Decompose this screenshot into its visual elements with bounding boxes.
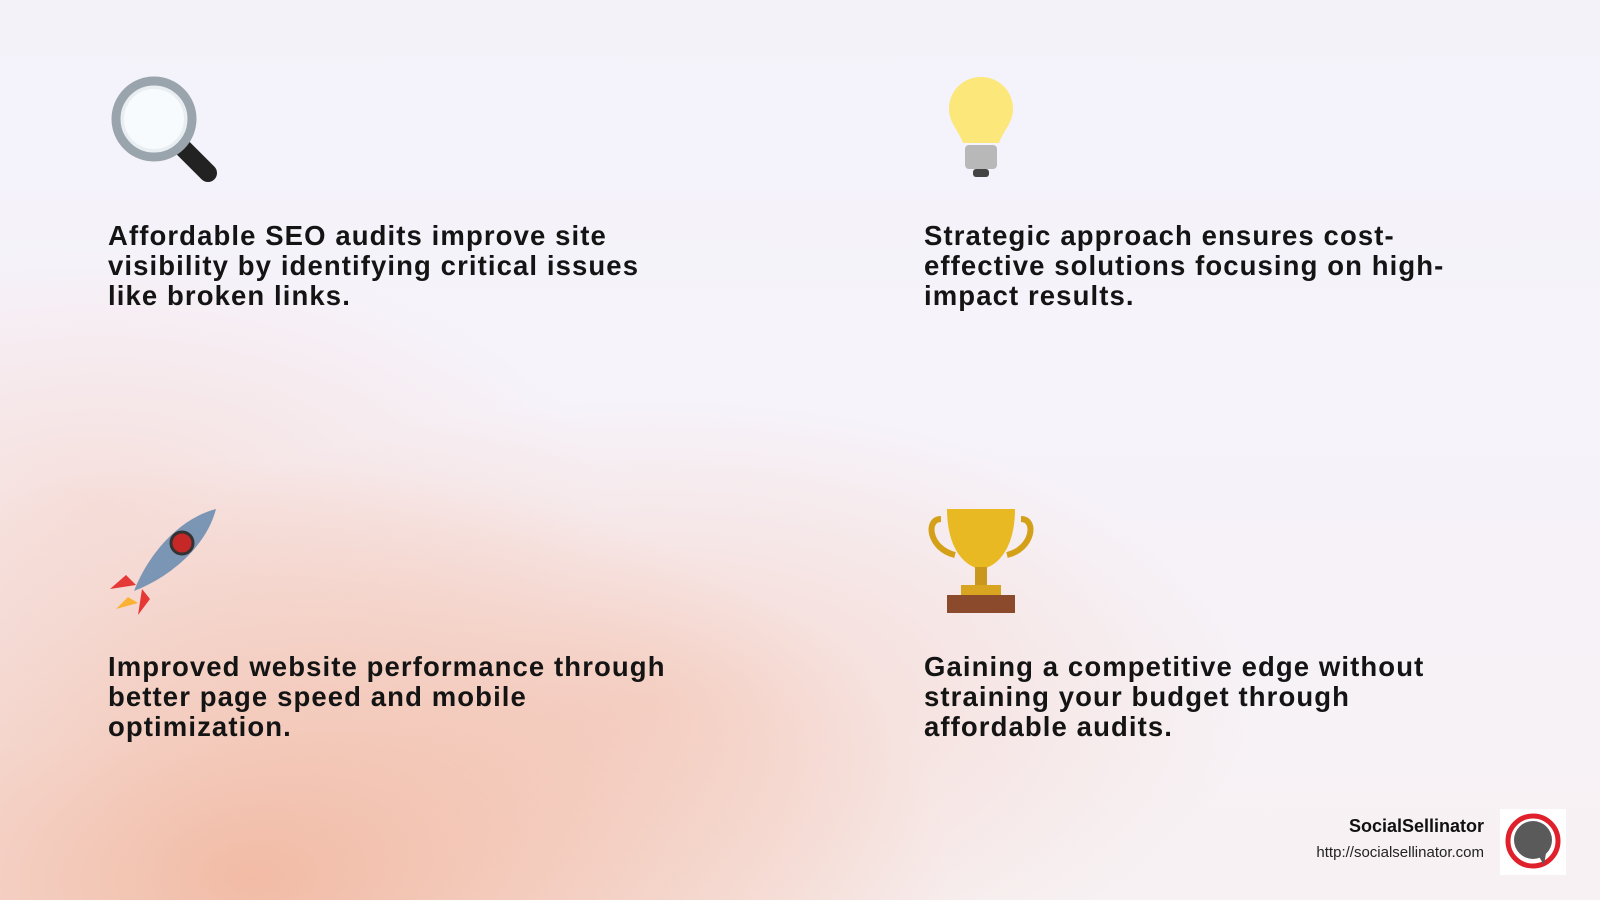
brand block xyxy=(1316,809,1566,875)
logo xyxy=(1500,809,1566,875)
brand url: http://socialsellinator.com xyxy=(1316,844,1484,861)
brand name: SocialSellinator xyxy=(1349,816,1484,836)
icon: light bulb xyxy=(949,77,1013,177)
icon: magnifying glass xyxy=(112,76,217,182)
text: strategic: Strategic approach ensures cost-effective solutions focusing on high-impact results. xyxy=(924,220,1444,311)
text: audits: Affordable SEO audits improve site visibility by identifying critical issues like broken links. xyxy=(108,220,639,311)
icon: rocket xyxy=(110,509,216,615)
icon: trophy xyxy=(928,509,1034,613)
text: performance: Improved website performance through better page speed and mobile optimization. xyxy=(108,651,666,742)
text: competitive edge: Gaining a competitive edge without straining your budget through affordable audits. xyxy=(924,651,1424,742)
